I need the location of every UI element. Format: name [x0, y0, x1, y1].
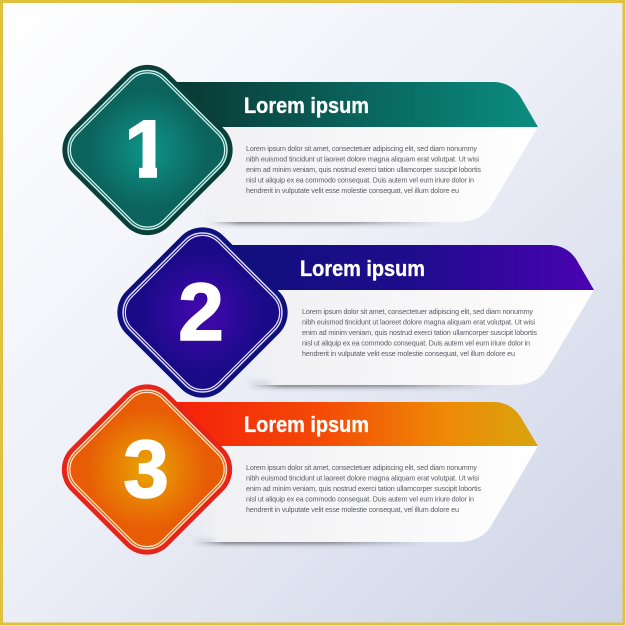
body text	[246, 144, 481, 195]
text panel	[190, 446, 538, 542]
panel: step 1	[62, 64, 538, 236]
panel shadow	[193, 538, 428, 544]
header ribbon	[231, 245, 594, 290]
body text: enim ad minim veniam, quis nostrud exerci tation ullamcorper suscipit lobortis	[246, 484, 481, 493]
body text: enim ad minim veniam, quis nostrud exerci tation ullamcorper suscipit lobortis	[302, 328, 537, 337]
badge: number 2	[105, 215, 300, 410]
body text: nisl ut aliquip ex ea commodo consequat. Duis autem vel eum iriure dolor in	[246, 176, 474, 184]
body text: nibh euismod tincidunt ut laoreet dolore magna aliquam erat volutpat. Ut wisi	[246, 154, 479, 164]
panel shadow	[247, 381, 497, 387]
header ribbon	[175, 402, 538, 446]
panel shadow	[207, 218, 442, 224]
body text: nibh euismod tincidunt ut laoreet dolore magna aliquam erat volutpat. Ut wisi	[302, 318, 535, 326]
body text: hendrerit in vulputate velit esse molestie consequat, vel illum dolore eu	[246, 505, 459, 514]
body text: hendrerit in vulputate velit esse molestie consequat, vel illum dolore eu	[302, 349, 515, 358]
badge: number 2: 2	[178, 267, 224, 358]
badge: number 3: 3	[123, 424, 169, 515]
badge: number 3	[49, 372, 245, 567]
body text: hendrerit in vulputate velit esse molestie consequat, vel illum dolore eu	[246, 186, 459, 195]
body text: Lorem ipsum dolor sit amet, consectetuer adipiscing elit, sed diam nonummy	[246, 144, 477, 153]
panel: step 3	[49, 372, 538, 567]
heading: Lorem ipsum	[244, 93, 369, 118]
body text: nisl ut aliquip ex ea commodo consequat. Duis autem vel eum iriure dolor in	[246, 494, 474, 504]
panel: step 2	[105, 215, 594, 410]
badge: number 1: 1	[124, 104, 170, 195]
body text	[246, 463, 481, 514]
text panel	[190, 127, 538, 222]
body text: Lorem ipsum dolor sit amet, consectetuer adipiscing elit, sed diam nonummy	[246, 463, 477, 472]
body text	[302, 307, 537, 358]
body text: nisl ut aliquip ex ea commodo consequat. Duis autem vel eum iriure dolor in	[302, 338, 530, 348]
badge: number 1	[62, 64, 233, 236]
text panel	[246, 290, 594, 385]
body text: nibh euismod tincidunt ut laoreet dolore magna aliquam erat volutpat. Ut wisi	[246, 474, 479, 482]
body text: Lorem ipsum dolor sit amet, consectetuer adipiscing elit, sed diam nonummy	[302, 307, 533, 316]
body text: enim ad minim veniam, quis nostrud exerci tation ullamcorper suscipit lobortis	[246, 165, 481, 174]
heading: Lorem ipsum	[244, 412, 369, 437]
heading: Lorem ipsum	[300, 256, 425, 281]
header ribbon	[175, 82, 538, 127]
